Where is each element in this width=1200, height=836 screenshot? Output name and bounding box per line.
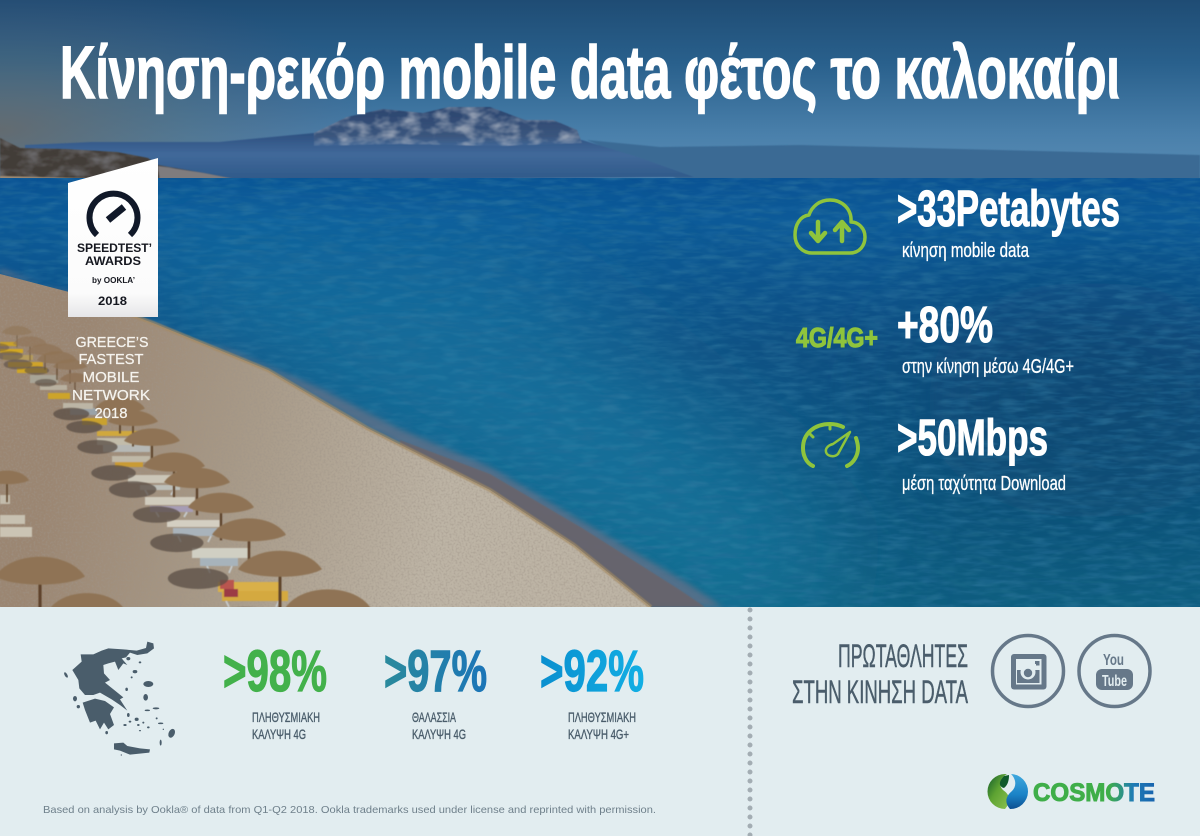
award name: SPEEDTEST’ bbox=[77, 243, 152, 255]
coverage stat: 98 percent bbox=[223, 639, 327, 742]
coverage stat: 97 percent bbox=[384, 639, 487, 742]
value: >92% bbox=[540, 639, 644, 704]
award name: 2018 bbox=[98, 294, 127, 308]
icon: youtube bbox=[1079, 636, 1150, 706]
sky bbox=[0, 0, 1200, 180]
icon: speed gauge bbox=[803, 424, 858, 466]
badge caption: NETWORK bbox=[72, 388, 150, 404]
speedtest award badge bbox=[68, 158, 158, 317]
cosmote logo bbox=[988, 774, 1155, 809]
label: ΚΑΛΥΨΗ 4G bbox=[252, 726, 306, 742]
icon: instagram bbox=[992, 636, 1064, 706]
label bbox=[252, 709, 320, 742]
source note: Based on analysis by Ookla® of data from Q1-Q2 2018. Ookla trademarks used under license and reprinted with permission. bbox=[43, 804, 656, 816]
sand beach bbox=[0, 270, 660, 610]
straw umbrellas bbox=[0, 326, 370, 607]
sun loungers bbox=[0, 342, 288, 607]
data champions heading: ΠΡΩΤΑΘΛΗΤΕΣ bbox=[838, 638, 968, 674]
icon: youtube: You bbox=[1103, 652, 1124, 669]
badge caption bbox=[72, 335, 150, 422]
value: >50Mbps bbox=[897, 409, 1048, 466]
description: κίνηση mobile data bbox=[902, 240, 1030, 262]
map of Greece bbox=[63, 642, 176, 756]
left headland bbox=[0, 138, 232, 178]
data champions heading: ΣΤΗΝ ΚΙΝΗΣΗ DATA bbox=[792, 674, 968, 710]
award name: AWARDS bbox=[85, 256, 141, 268]
bottom panel bbox=[0, 607, 1200, 836]
value: >98% bbox=[223, 639, 327, 704]
icon: cloud with arrows bbox=[795, 200, 865, 253]
stat: 33 petabytes bbox=[795, 180, 1120, 262]
stat: 50 Mbps bbox=[803, 409, 1066, 495]
icon: youtube: Tube bbox=[1102, 673, 1127, 690]
award name: by OOKLA’ bbox=[92, 276, 135, 285]
value: >97% bbox=[384, 639, 487, 704]
value: +80% bbox=[897, 296, 993, 353]
badge caption: GREECE’S bbox=[76, 335, 148, 351]
logo mark bbox=[988, 774, 1028, 809]
badge caption: FASTEST bbox=[78, 352, 144, 368]
label: ΚΑΛΥΨΗ 4G bbox=[412, 726, 466, 742]
label bbox=[412, 709, 466, 742]
data champions heading bbox=[792, 638, 968, 710]
icon: 4G label: 4G/4G+ bbox=[796, 322, 878, 353]
shoreline wet sand bbox=[0, 268, 723, 607]
sea bbox=[0, 178, 1200, 607]
badge caption: MOBILE bbox=[82, 370, 140, 386]
label: ΠΛΗΘΥΣΜΙΑΚΗ bbox=[252, 709, 320, 725]
label: ΠΛΗΘΥΣΜΙΑΚΗ bbox=[568, 709, 636, 725]
stat: 80 percent bbox=[796, 296, 1074, 378]
coverage stat: 92 percent bbox=[540, 639, 644, 742]
background photo: beach and sea bbox=[0, 0, 1200, 660]
label bbox=[568, 709, 636, 742]
wordmark: COSMOTE bbox=[1033, 779, 1155, 807]
award name bbox=[77, 243, 152, 308]
distant mountains bbox=[25, 105, 1200, 180]
badge caption: 2018 bbox=[94, 406, 128, 422]
description: στην κίνηση μέσω 4G/4G+ bbox=[902, 356, 1074, 378]
label: ΚΑΛΥΨΗ 4G+ bbox=[568, 726, 629, 742]
label: ΘΑΛΑΣΣΙΑ bbox=[412, 709, 456, 725]
icon: speedometer bbox=[90, 194, 138, 235]
description: μέση ταχύτητα Download bbox=[902, 473, 1066, 495]
badge background bbox=[68, 158, 158, 317]
